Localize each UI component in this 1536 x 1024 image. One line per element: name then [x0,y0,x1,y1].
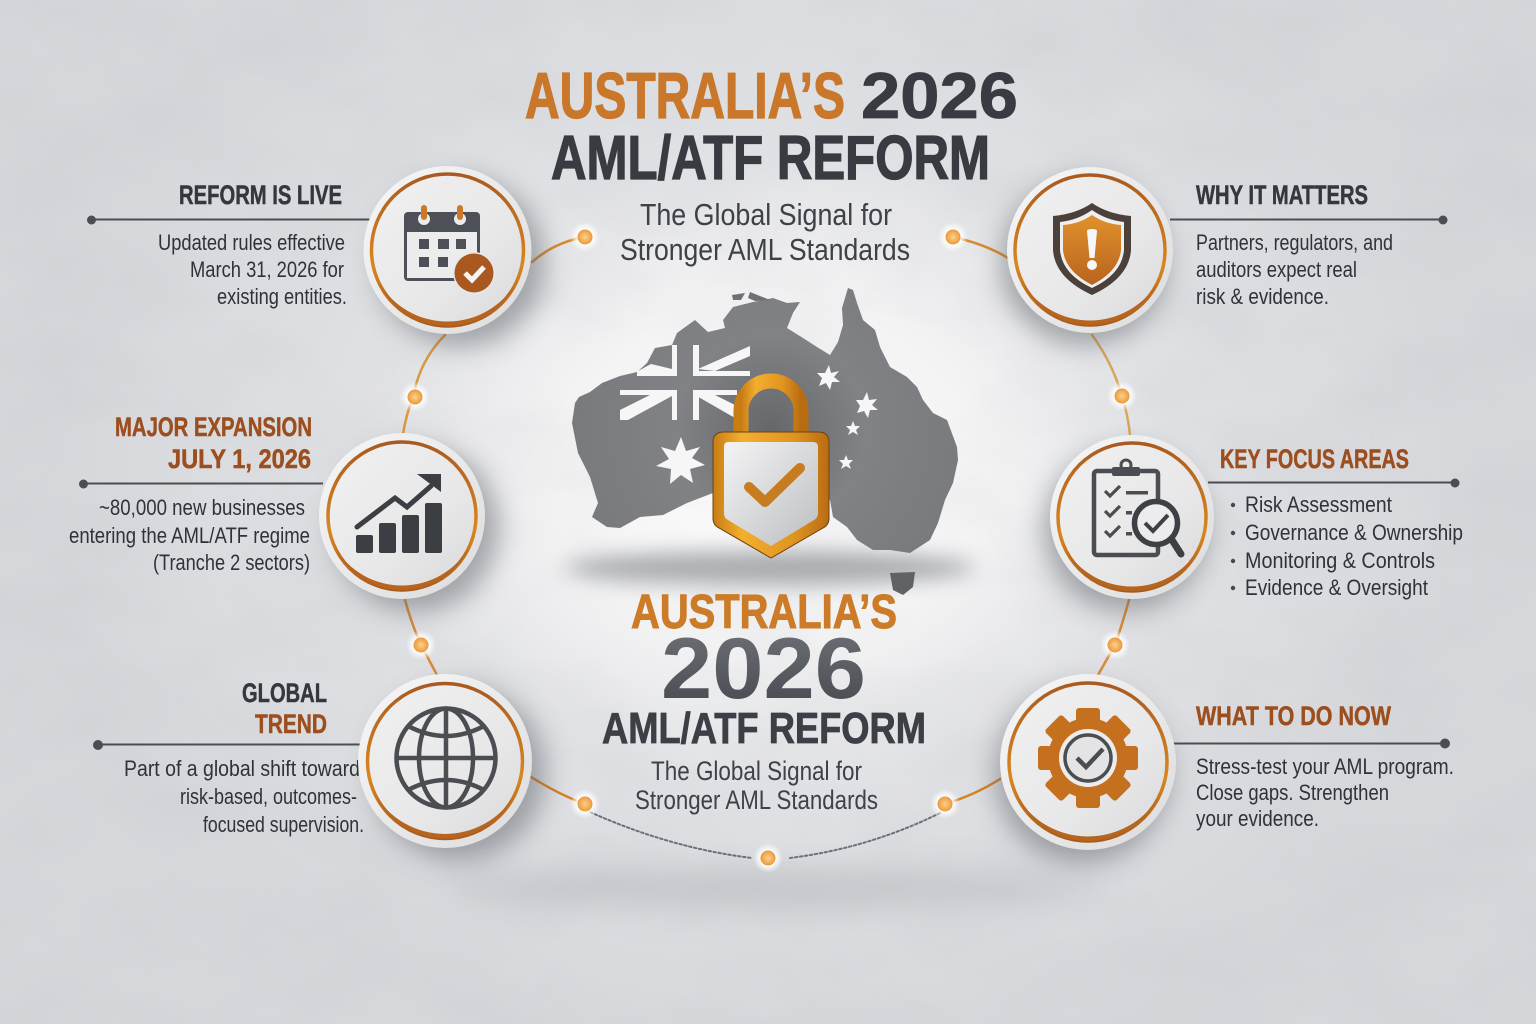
Australia map with flag [565,288,975,595]
subtitle: Stronger AML Standards [620,232,910,267]
center title block: Stronger AML Standards [635,785,878,815]
center title block: AML/ATF REFORM [602,704,926,753]
leader line and heading [87,180,372,224]
glowing nodes [400,222,1137,873]
panel: major expansion [69,412,499,611]
connector network [403,237,1130,858]
panel: key focus areas [1044,435,1463,611]
panel: global trend [93,674,546,860]
leader line and heading: WHAT TO DO NOW [1196,701,1391,731]
center title block: AUSTRALIA’S [631,586,897,639]
body text: risk-based, outcomes- [180,784,357,809]
subtitle: The Global Signal for [640,197,892,232]
body text [1196,230,1393,309]
icon: bar chart with arrow [356,474,442,553]
badge circle [1044,435,1214,611]
icon: shield with exclamation [1053,203,1131,295]
center title block: 2026 [661,621,866,717]
body text: Stress-test your AML program. [1196,754,1454,779]
bullet list: Governance & Ownership [1245,520,1463,545]
leader line and heading [1208,444,1460,488]
badge circle [994,674,1176,862]
bullet list: Risk Assessment [1245,492,1393,517]
badge circle [364,166,545,346]
leader line and heading: REFORM IS LIVE [179,180,342,210]
body text: ~80,000 new businesses [99,495,305,520]
body text [124,756,364,837]
bullet list [1231,492,1463,600]
body text: Part of a global shift toward [124,756,360,781]
title [525,59,1018,193]
bullet list: Monitoring & Controls [1245,548,1435,573]
icon: clipboard and magnifier [1094,460,1181,555]
bullet list: Evidence & Oversight [1245,575,1429,600]
leader line and headings: GLOBAL [242,678,327,708]
panel: why it matters [1001,167,1448,345]
title: AML/ATF REFORM [551,124,990,193]
leader line and headings [93,678,363,750]
body text: your evidence. [1196,806,1319,831]
leader line and heading: KEY FOCUS AREAS [1220,444,1409,474]
center title block [602,586,926,815]
padlock shield [713,381,829,558]
body text: risk & evidence. [1196,284,1329,309]
leader line and headings: TREND [255,709,327,739]
badge circle [358,674,546,860]
leader line and headings: MAJOR EXPANSION [115,412,312,442]
icon: globe [396,708,496,808]
body text: (Tranche 2 sectors) [153,550,310,575]
body text [158,230,347,309]
body text: Partners, regulators, and [1196,230,1393,255]
leader line and heading [1172,701,1450,748]
subtitle [620,197,910,267]
leader line and heading: WHY IT MATTERS [1196,180,1368,210]
icon: calendar [404,205,495,294]
badge circle [1001,167,1173,345]
panel: what to do now [994,674,1454,862]
leader line and headings [79,412,323,488]
body text [1196,754,1454,831]
body text: March 31, 2026 for [190,257,344,282]
panel: reform is live [87,166,545,346]
title: 2026 [861,59,1018,132]
center title block: The Global Signal for [651,756,862,786]
leader line and heading [1170,180,1448,224]
body text: Updated rules effective [158,230,345,255]
body text: entering the AML/ATF regime [69,523,310,548]
title: AUSTRALIA’S [525,59,845,132]
body text: auditors expect real [1196,257,1357,282]
leader line and headings: JULY 1, 2026 [168,444,311,474]
body text: Close gaps. Strengthen [1196,780,1389,805]
body text: existing entities. [217,284,347,309]
body text: focused supervision. [203,812,364,837]
icon: gear with check [1038,708,1138,808]
badge circle [319,433,499,611]
body text [69,495,310,575]
